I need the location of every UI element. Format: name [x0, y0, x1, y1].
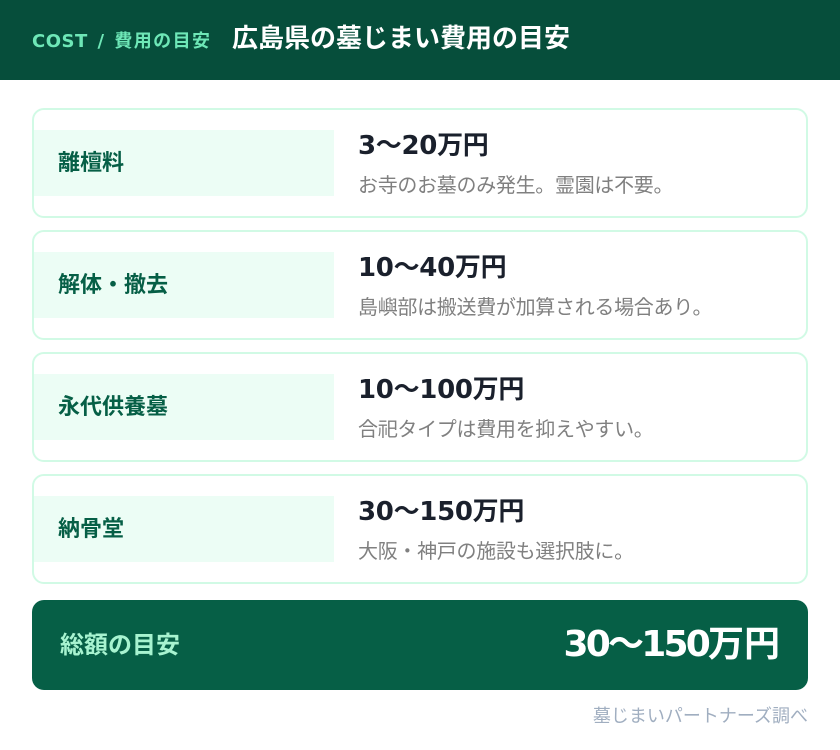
header band — [0, 0, 840, 80]
label: 離檀料 — [34, 130, 334, 196]
label: 納骨堂 — [34, 496, 334, 562]
panel: total — [32, 600, 808, 690]
total amount: 30〜150万円 — [564, 624, 780, 665]
price: 解体・撤去: 10〜40万円 — [358, 253, 506, 283]
header eyebrow: COST / 費用の目安 — [32, 31, 211, 52]
price: 永代供養墓: 10〜100万円 — [358, 375, 524, 405]
panel: 永代供養墓 — [32, 352, 808, 462]
description: 永代供養墓: 合祀タイプは費用を抑えやすい。 — [358, 417, 654, 441]
label: 永代供養墓 — [34, 374, 334, 440]
total label: 総額の目安 — [60, 631, 180, 659]
panel: 納骨堂 — [32, 474, 808, 584]
price: 離檀料: 3〜20万円 — [358, 131, 488, 161]
description: 解体・撤去: 島嶼部は搬送費が加算される場合あり。 — [358, 295, 712, 319]
description: 離檀料: お寺のお墓のみ発生。霊園は不要。 — [358, 173, 673, 197]
label: 解体・撤去 — [34, 252, 334, 318]
price: 納骨堂: 30〜150万円 — [358, 497, 524, 527]
description: 納骨堂: 大阪・神戸の施設も選択肢に。 — [358, 539, 634, 563]
panel: 解体・撤去 — [32, 230, 808, 340]
panel: 離檀料 — [32, 108, 808, 218]
title: 広島県の墓じまい費用の目安 — [232, 24, 570, 54]
source note: 墓じまいパートナーズ調べ — [593, 706, 808, 727]
label: 納骨堂: 納骨堂 — [58, 517, 124, 542]
label: 永代供養墓: 永代供養墓 — [58, 395, 168, 420]
label: 解体・撤去: 解体・撤去 — [58, 273, 168, 298]
label: 離檀料: 離檀料 — [58, 151, 124, 176]
